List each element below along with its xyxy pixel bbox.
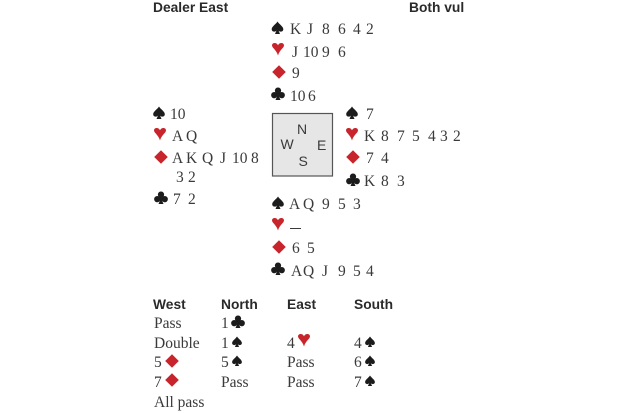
- auction headers: [153, 297, 393, 312]
- auction: west bids: 5: [154, 354, 162, 371]
- auction: south bids: 6: [354, 354, 362, 371]
- auction: east bids: [287, 334, 315, 391]
- panel: compass box: N: [297, 121, 307, 137]
- panel: north hand: J: [292, 44, 298, 61]
- panel: south hand: Q: [303, 196, 314, 213]
- heading: vulnerability: Both vul: [409, 0, 464, 15]
- auction: south bids: 7: [354, 374, 362, 391]
- auction: east bids: Pass: [287, 354, 315, 371]
- auction: south bids: [354, 335, 375, 391]
- auction headers: South: [354, 297, 393, 312]
- panel: east hand: [346, 106, 461, 190]
- panel: north hand: 6: [308, 88, 316, 105]
- panel: east hand: 7: [366, 106, 374, 123]
- panel: south hand: Q: [303, 263, 314, 280]
- auction: west bids: Double: [154, 335, 200, 352]
- panel: south hand: 5: [353, 263, 361, 280]
- panel: auction table: [153, 297, 393, 411]
- panel: compass box: E: [317, 137, 326, 153]
- panel: north hand: 6: [338, 44, 346, 61]
- panel: south hand: 5: [338, 196, 346, 213]
- panel: south hand: A: [291, 263, 303, 280]
- auction: south bids: 4: [354, 335, 362, 352]
- panel: north hand: 10: [290, 88, 306, 105]
- panel: west hand: 10: [170, 106, 186, 123]
- panel: east hand: 2: [453, 128, 461, 145]
- auction: west bids: [154, 315, 204, 411]
- panel: west hand: 3: [176, 169, 184, 186]
- panel: west hand: J: [220, 150, 226, 167]
- auction: north bids: Pass: [221, 374, 249, 391]
- panel: south hand: 3: [353, 196, 361, 213]
- panel: compass box: [272, 114, 332, 176]
- auction: west bids: 7: [154, 374, 162, 391]
- auction: east bids: 4: [287, 335, 295, 352]
- panel: south hand: 5: [307, 240, 315, 257]
- auction: north bids: [221, 315, 249, 391]
- panel: south hand: 9: [338, 263, 346, 280]
- auction: west bids: Pass: [154, 315, 182, 332]
- panel: north hand: K: [290, 21, 302, 38]
- auction headers: East: [287, 297, 317, 312]
- panel: north hand: 10: [303, 44, 319, 61]
- panel: east hand: K: [364, 173, 376, 190]
- auction: north bids: 1: [221, 315, 229, 332]
- panel: north hand: 9: [322, 44, 330, 61]
- panel: east hand: 3: [397, 173, 405, 190]
- panel: west hand: 10: [232, 150, 248, 167]
- panel: south hand: J: [322, 263, 328, 280]
- panel: east hand: 4: [381, 150, 389, 167]
- panel: west hand: A: [172, 128, 184, 145]
- heading: dealer: Dealer East: [153, 0, 229, 15]
- panel: north hand: [271, 21, 374, 105]
- panel: west hand: 8: [251, 150, 259, 167]
- panel: north hand: 6: [338, 21, 346, 38]
- panel: east hand: 7: [366, 150, 374, 167]
- auction headers: West: [153, 297, 186, 312]
- auction headers: North: [221, 297, 258, 312]
- panel: south hand: 9: [322, 196, 330, 213]
- auction: north bids: 5: [221, 354, 229, 371]
- panel: west hand: Q: [202, 150, 213, 167]
- panel: east hand: 4: [428, 128, 436, 145]
- auction: north bids: 1: [221, 335, 229, 352]
- auction: west bids: All pass: [154, 394, 204, 411]
- panel: west hand: 2: [188, 191, 196, 208]
- panel: east hand: K: [364, 128, 376, 145]
- panel: east hand: 3: [440, 128, 448, 145]
- auction: east bids: Pass: [287, 374, 315, 391]
- panel: west hand: 2: [188, 169, 196, 186]
- panel: north hand: J: [307, 21, 313, 38]
- panel: east hand: 8: [381, 128, 389, 145]
- panel: west hand: [153, 106, 259, 208]
- panel: west hand: K: [186, 150, 198, 167]
- panel: compass box: S: [298, 153, 308, 169]
- panel: south hand: 6: [292, 240, 300, 257]
- panel: east hand: 7: [397, 128, 405, 145]
- panel: east hand: 5: [412, 128, 420, 145]
- panel: south hand: 4: [366, 263, 374, 280]
- panel: north hand: 2: [366, 21, 374, 38]
- panel: north hand: 4: [353, 21, 361, 38]
- panel: west hand: Q: [186, 128, 197, 145]
- panel: east hand: 8: [381, 173, 389, 190]
- panel: south hand: A: [289, 196, 301, 213]
- panel: west hand: A: [172, 150, 184, 167]
- panel: south hand: [271, 196, 374, 280]
- panel: compass box: W: [280, 136, 294, 152]
- panel: north hand: 8: [322, 21, 330, 38]
- panel: north hand: 9: [292, 65, 300, 82]
- panel: west hand: 7: [173, 191, 181, 208]
